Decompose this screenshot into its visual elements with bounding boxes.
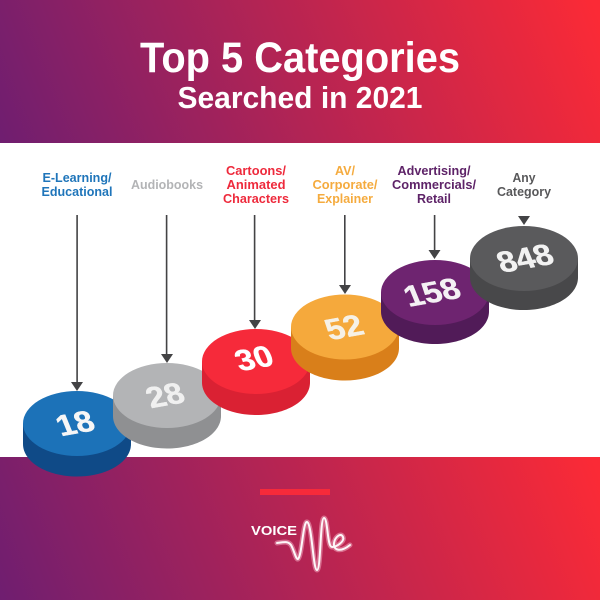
disc: Any Category 848: 848 [491, 237, 559, 279]
logo: VoiceMe: VOICE [251, 523, 297, 538]
title [140, 34, 460, 115]
arrow: Advertising [428, 215, 440, 259]
arrow: AV [339, 215, 351, 294]
label: Any Category [497, 171, 551, 199]
accent bar [260, 489, 330, 495]
arrow: E-Learning [71, 215, 83, 391]
title: Searched in 2021 [178, 80, 422, 115]
disc: Cartoons 30 [202, 329, 310, 415]
title: Top 5 Categories [140, 34, 460, 82]
disc: Audiobooks 28 [113, 363, 221, 448]
disc: AV 52: 52 [319, 308, 369, 346]
label: Advertising/Commercials/Retail [392, 164, 477, 206]
header band [0, 0, 600, 143]
label: Audiobooks: Audiobooks [131, 178, 203, 192]
label: Advertising/Commercials/Retail: Commercials/ [392, 178, 477, 192]
label: Cartoons/Animated Characters: Characters [223, 192, 289, 206]
disc: E-Learning 18 [23, 391, 131, 476]
disc: Any Category 848 [470, 226, 578, 310]
label: Cartoons/Animated Characters [223, 164, 289, 206]
logo: VoiceMe [251, 518, 350, 570]
label: AV/Corporate/Explainer [312, 164, 378, 206]
label: E-Learning/Educational: E-Learning/ [42, 171, 112, 185]
label: AV/Corporate/Explainer: Explainer [317, 192, 373, 206]
label: AV/Corporate/Explainer: Corporate/ [312, 178, 378, 192]
arrow: Cartoons [249, 215, 261, 329]
disc: E-Learning 18: 18 [50, 404, 100, 442]
arrow: Audiobooks [161, 215, 173, 363]
label: Cartoons/Animated Characters: Animated [226, 178, 286, 192]
disc: Advertising 158 [381, 260, 489, 344]
disc: Audiobooks 28: 28 [140, 376, 190, 414]
label: Any Category: Any [512, 171, 536, 185]
label: AV/Corporate/Explainer: AV/ [335, 164, 356, 178]
label: E-Learning/Educational: Educational [42, 185, 112, 199]
disc: Advertising 158: 158 [398, 271, 466, 313]
label: Advertising/Commercials/Retail: Advertising/ [398, 164, 471, 178]
footer band [0, 457, 600, 600]
disc: AV 52 [291, 294, 399, 380]
label: Cartoons/Animated Characters: Cartoons/ [226, 164, 287, 178]
label: E-Learning/Educational [42, 171, 112, 199]
arrow: Any Category [518, 216, 530, 225]
label: Any Category: Category [497, 185, 551, 199]
disc: Cartoons 30: 30 [229, 339, 279, 377]
label: Advertising/Commercials/Retail: Retail [417, 192, 451, 206]
